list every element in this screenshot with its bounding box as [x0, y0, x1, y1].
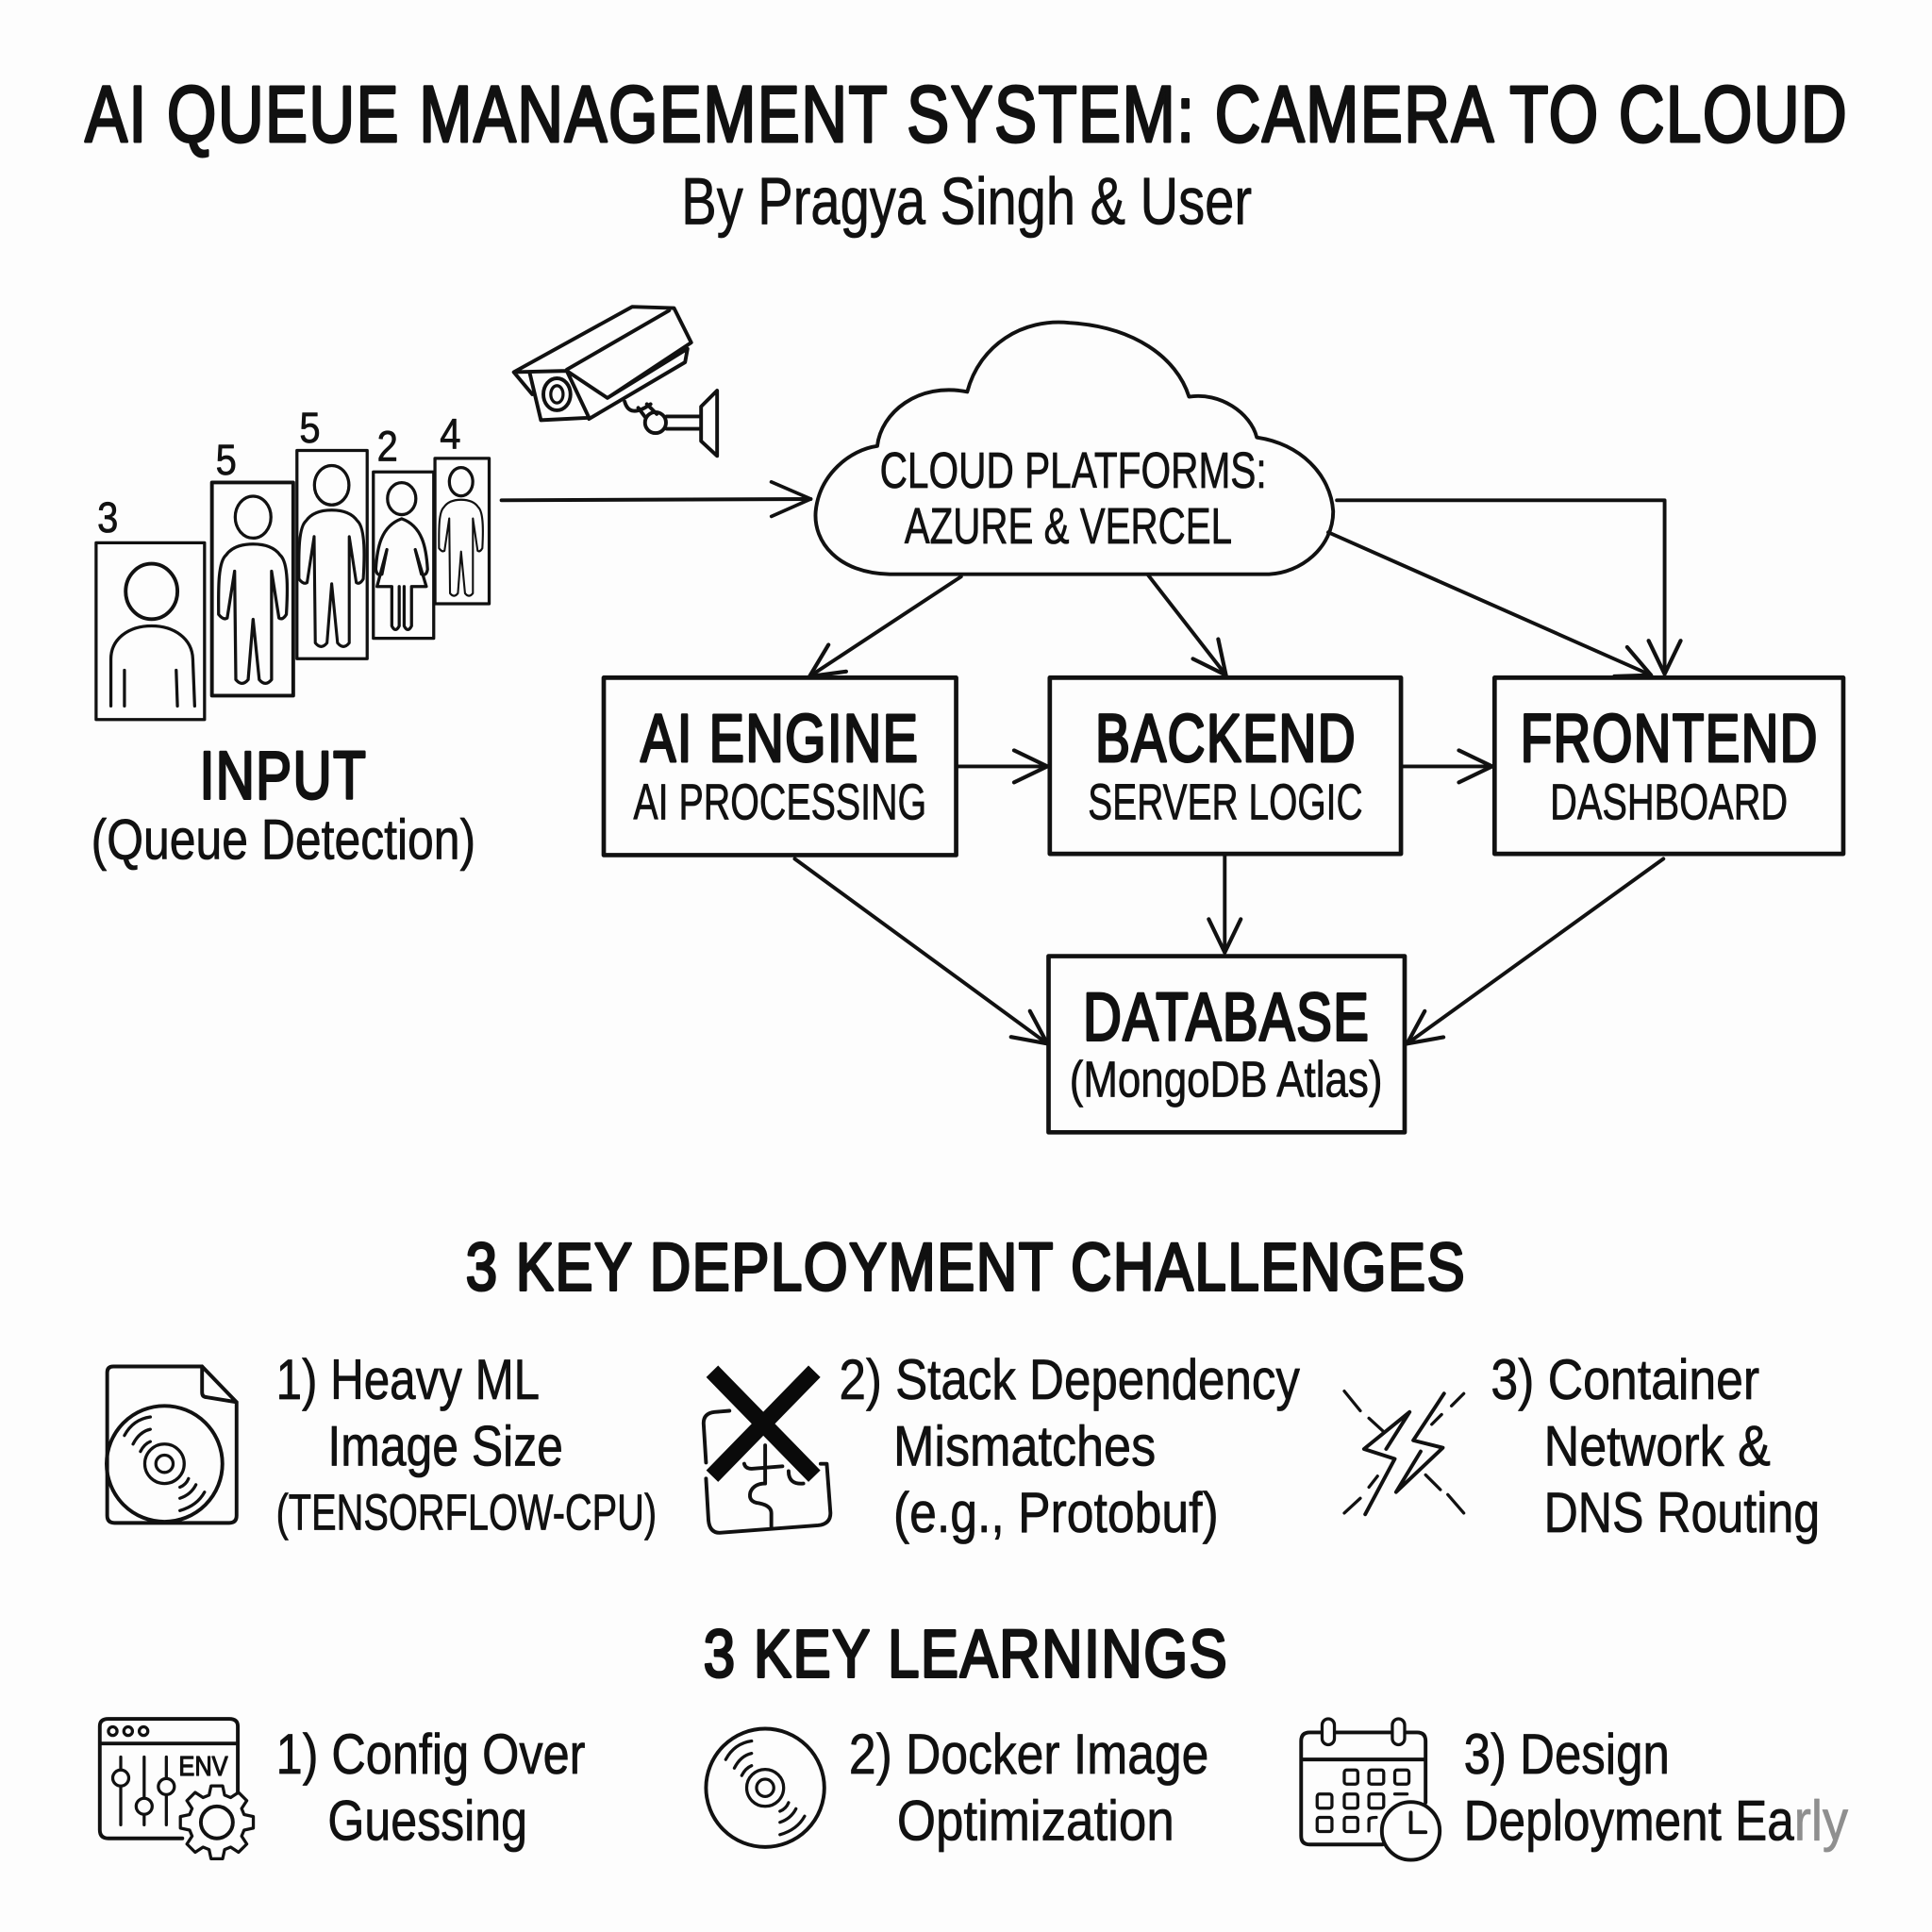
cloud label: [880, 443, 1267, 555]
learning 2 text: 2) Docker Image: [849, 1722, 1208, 1786]
challenge 1 text: [276, 1347, 657, 1541]
panel: AI engine: AI PROCESSING: [633, 775, 926, 831]
arrow: cloud to frontend elbow: [1337, 500, 1665, 674]
panel: learning 2: [706, 1722, 1208, 1853]
arrow: cloud to frontend diagonal: [1328, 532, 1651, 675]
challenge 2 text: 2) Stack Dependency: [839, 1347, 1300, 1411]
challenge 3 text: 3) Container: [1491, 1347, 1759, 1411]
learning 2 text: [849, 1722, 1208, 1853]
person 1 with count 3: 3: [97, 493, 118, 541]
panel: AI engine: [604, 677, 957, 855]
arrow: backend to frontend: [1404, 765, 1492, 768]
learning 2 text: Optimization: [897, 1789, 1174, 1853]
learning 3 text: [1464, 1722, 1849, 1853]
learning 1 text: 1) Config Over: [276, 1722, 585, 1786]
challenge 3 text: DNS Routing: [1544, 1480, 1820, 1544]
challenge 2 text: [839, 1347, 1300, 1544]
challenge 1 text: Image Size: [327, 1414, 563, 1478]
person 1 with count 3: [96, 493, 205, 720]
challenge 3 text: Network &: [1544, 1414, 1771, 1478]
challenge 3 text: [1491, 1347, 1820, 1544]
person 3 with count 5: 5: [299, 404, 321, 452]
person 2 with count 5: 5: [216, 436, 237, 484]
panel: challenge 1: [107, 1347, 657, 1541]
icon: lightning network break: [1344, 1391, 1464, 1514]
icon: cloud: [815, 323, 1333, 575]
challenge 1 text: (TENSORFLOW-CPU): [276, 1486, 657, 1541]
input label: INPUT: [200, 738, 367, 813]
learning 1 text: Guessing: [327, 1789, 527, 1853]
subtitle: By Pragya Singh & User: [681, 164, 1252, 239]
learning 3 text: rly: [1794, 1789, 1849, 1853]
arrow: frontend to database: [1407, 858, 1663, 1043]
panel: backend: SERVER LOGIC: [1088, 775, 1363, 831]
panel: learning 3: [1301, 1719, 1849, 1860]
icon: broken puzzle with X: [704, 1372, 830, 1533]
challenge 2 text: (e.g., Protobuf): [893, 1480, 1219, 1544]
panel: frontend: [1494, 677, 1843, 854]
icon: env config window and gear: ENV: [178, 1752, 228, 1782]
person 5 with count 4: [435, 409, 490, 604]
cloud label: CLOUD PLATFORMS:: [880, 443, 1267, 499]
panel: backend: [1050, 677, 1401, 854]
challenge 2 text: Mismatches: [893, 1414, 1156, 1478]
panel: backend: BACKEND: [1095, 701, 1357, 776]
icon: optimized disc: [706, 1728, 824, 1847]
input sublabel: (Queue Detection): [92, 808, 475, 871]
panel: frontend: DASHBOARD: [1550, 775, 1788, 831]
panel: challenge 2: [704, 1347, 1300, 1544]
heading: challenges: 3 KEY DEPLOYMENT CHALLENGES: [466, 1230, 1466, 1306]
person 4 with count 2: 2: [377, 422, 398, 470]
learning 3 text: Deployment Ea: [1464, 1789, 1794, 1853]
person 4 with count 2: [374, 422, 434, 639]
arrow: cloud to AI engine: [809, 576, 961, 676]
heading: learnings: 3 KEY LEARNINGS: [704, 1617, 1228, 1692]
panel: learning 1: [100, 1719, 585, 1858]
learning 1 text: [276, 1722, 585, 1853]
panel: cloud platforms: [815, 323, 1333, 575]
panel: AI engine: AI ENGINE: [641, 701, 919, 776]
panel: database: DATABASE: [1083, 979, 1370, 1055]
arrow: input to cloud: [502, 499, 810, 500]
person 3 with count 5: [297, 404, 367, 658]
panel: challenge 3: [1344, 1347, 1820, 1544]
arrow: cloud to backend: [1148, 575, 1226, 675]
panel: frontend: FRONTEND: [1521, 701, 1819, 776]
panel: database: [1049, 957, 1405, 1132]
learning 3 text: 3) Design: [1464, 1722, 1670, 1786]
icon: security camera: [514, 307, 717, 456]
arrow: AI engine to backend: [958, 765, 1047, 768]
panel: input queue detection: [92, 404, 490, 871]
panel: database: (MongoDB Atlas): [1070, 1052, 1382, 1108]
arrow: AI engine to database: [794, 858, 1047, 1043]
person 2 with count 5: [212, 436, 293, 695]
challenge 1 text: 1) Heavy ML: [276, 1347, 540, 1411]
icon: env config window and gear: [100, 1719, 254, 1858]
person 5 with count 4: 4: [440, 409, 460, 458]
icon: calendar with clock: [1301, 1719, 1440, 1860]
icon: disc image file: [107, 1366, 237, 1523]
cloud label: AZURE & VERCEL: [905, 499, 1232, 555]
arrow: backend to database: [1224, 857, 1226, 953]
